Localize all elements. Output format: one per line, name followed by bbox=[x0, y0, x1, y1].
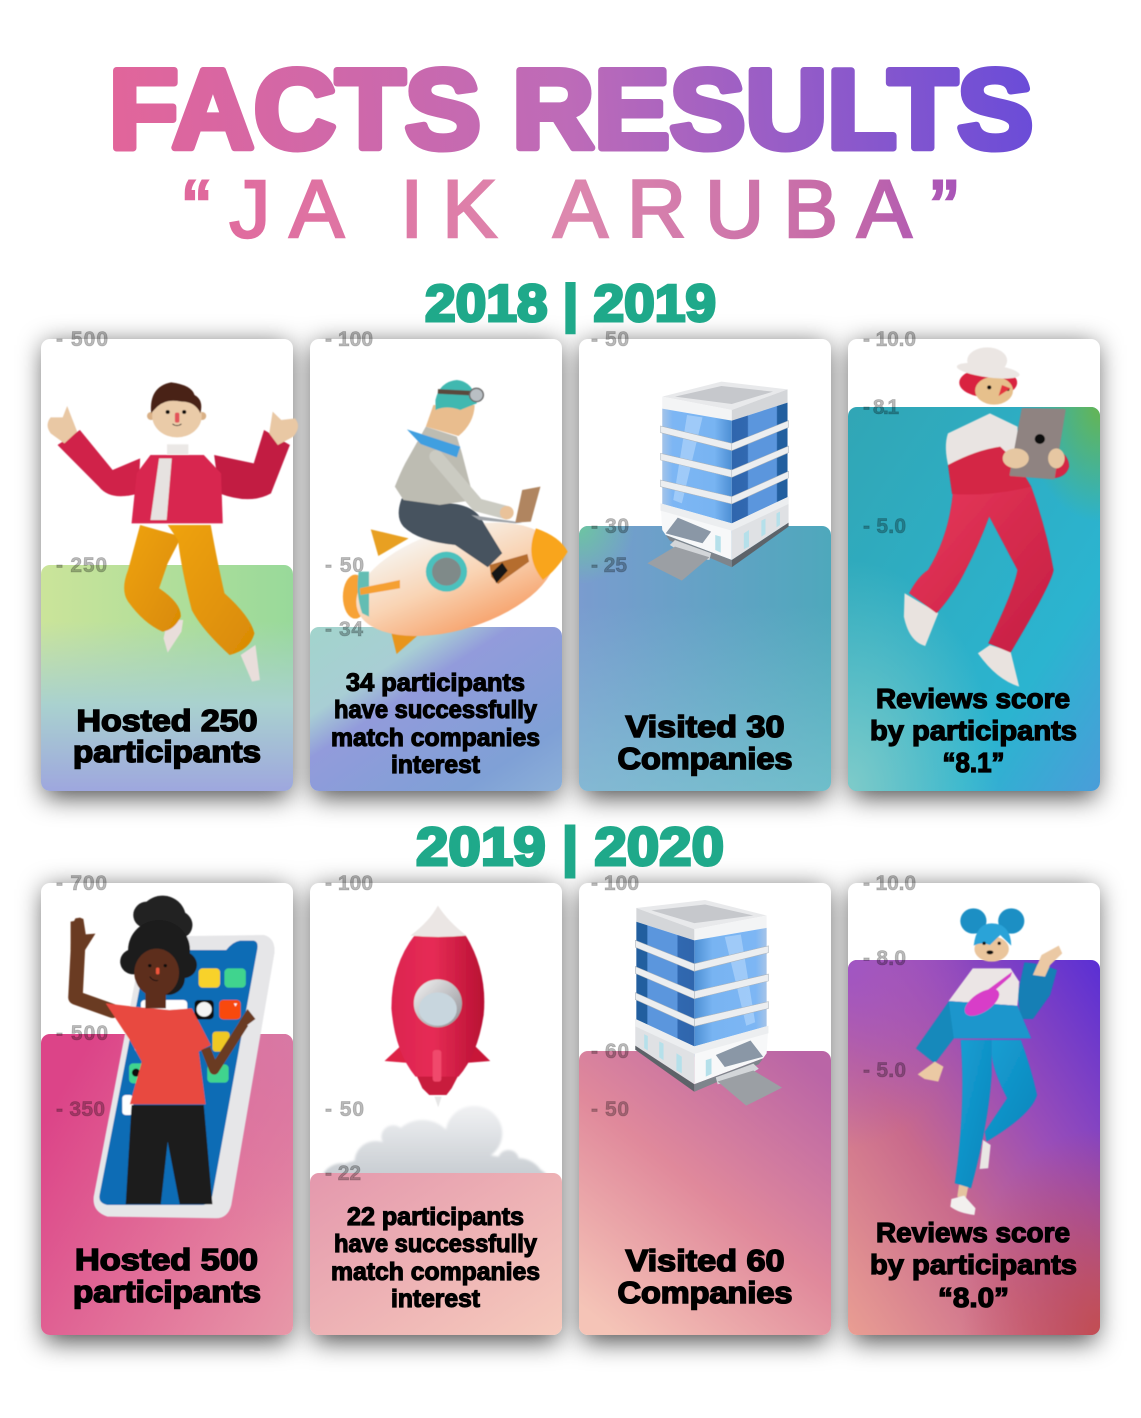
Panel: visited 60 companies bbox=[579, 872, 831, 1335]
Scale ticks: - 30 bbox=[591, 515, 629, 538]
Caption bbox=[73, 703, 261, 769]
Scale ticks bbox=[325, 872, 373, 1185]
Icon: dancing woman in blue bbox=[916, 908, 1062, 1215]
Caption: match companies bbox=[331, 724, 540, 752]
Subtitle: “JA IK ARUBA” bbox=[183, 164, 958, 255]
Caption: participants bbox=[73, 734, 261, 769]
Scale ticks bbox=[591, 872, 639, 1121]
Bar: 8.1 of 10 bbox=[848, 407, 1100, 791]
Caption: interest bbox=[391, 1285, 481, 1313]
Caption: 22 participants bbox=[347, 1203, 524, 1231]
Caption bbox=[618, 1243, 792, 1310]
Caption: “8.1” bbox=[942, 747, 1004, 778]
Scale ticks bbox=[591, 328, 629, 577]
Icon: figure with tablet bbox=[904, 347, 1069, 687]
Scale ticks bbox=[325, 328, 373, 641]
Caption bbox=[618, 709, 792, 776]
Scale ticks: - 100 bbox=[591, 872, 639, 895]
Scale ticks bbox=[56, 872, 108, 1121]
Scale ticks: - 60 bbox=[591, 1040, 629, 1063]
Scale ticks: - 8.0 bbox=[863, 947, 906, 970]
Icon: office building mirrored bbox=[635, 900, 782, 1106]
Caption bbox=[331, 669, 540, 779]
Caption: 34 participants bbox=[346, 669, 525, 697]
Scale ticks: - 50 bbox=[325, 554, 364, 577]
Caption: Hosted 500 bbox=[75, 1242, 258, 1277]
Panel: 22 participants matched bbox=[310, 872, 562, 1335]
Icon: jumping man bbox=[48, 382, 298, 682]
Scale ticks: - 50 bbox=[591, 328, 629, 351]
Panel: review score 8.1 bbox=[848, 328, 1100, 791]
Caption: Companies bbox=[618, 1275, 792, 1310]
Caption: Visited 60 bbox=[626, 1243, 784, 1278]
Caption: Visited 30 bbox=[626, 709, 784, 744]
Caption: Hosted 250 bbox=[76, 703, 258, 738]
Caption bbox=[870, 683, 1077, 778]
Caption bbox=[73, 1242, 261, 1309]
Card shadows bbox=[45, 345, 1096, 1341]
Scale ticks: - 5.0 bbox=[863, 515, 906, 538]
Scale ticks: - 50 bbox=[591, 1098, 629, 1121]
Bar: 500 of 700 bbox=[41, 1034, 293, 1335]
Scale ticks bbox=[56, 328, 108, 577]
Heading: 2019 | 2020: 2019 | 2020 bbox=[416, 817, 724, 878]
Caption: Reviews score bbox=[876, 1217, 1070, 1248]
Caption: Companies bbox=[618, 741, 792, 776]
Bar: 34 of 100 bbox=[310, 627, 562, 791]
Scale ticks: - 8.1 bbox=[863, 396, 899, 419]
Caption: interest bbox=[391, 751, 481, 779]
Scale ticks: - 100 bbox=[325, 872, 373, 895]
Caption bbox=[870, 1217, 1077, 1313]
Scale ticks bbox=[863, 872, 916, 1082]
Heading: 2018 | 2019: 2018 | 2019 bbox=[425, 275, 716, 333]
Scale ticks: - 100 bbox=[325, 328, 373, 351]
Scale ticks: - 250 bbox=[56, 554, 107, 577]
Caption: participants bbox=[73, 1274, 261, 1309]
Icon: cloud of exhaust bbox=[321, 1106, 550, 1212]
Caption bbox=[331, 1203, 540, 1313]
Caption: by participants bbox=[870, 1249, 1077, 1280]
Caption: match companies bbox=[331, 1258, 540, 1286]
Scale ticks: - 700 bbox=[56, 872, 107, 895]
Scale ticks: - 5.0 bbox=[863, 1059, 906, 1082]
Scale ticks: - 10.0 bbox=[863, 872, 916, 895]
Bar: 22 of 100 bbox=[310, 1173, 562, 1335]
Icon: office building bbox=[647, 382, 789, 581]
Scale ticks: - 34 bbox=[325, 618, 363, 641]
Icon: red rocket bbox=[385, 906, 490, 1107]
Bar: 30 of 50 bbox=[579, 526, 831, 791]
Scale ticks: - 50 bbox=[325, 1098, 364, 1121]
Panel: hosted 250 participants bbox=[41, 328, 298, 791]
Scale ticks: - 350 bbox=[56, 1098, 105, 1121]
Title: FACTS RESULTS bbox=[109, 47, 1033, 172]
Scale ticks: - 25 bbox=[591, 554, 627, 577]
Caption: by participants bbox=[870, 715, 1077, 746]
Bar: 250 of 500 bbox=[41, 565, 293, 791]
Caption: Reviews score bbox=[876, 683, 1070, 714]
Bar: 60 of 100 bbox=[579, 1051, 831, 1335]
Panel: review score 8.0 bbox=[848, 872, 1100, 1335]
Panel: hosted 500 participants bbox=[41, 872, 293, 1335]
Panel: visited 30 companies bbox=[579, 328, 831, 791]
Icon: woman and smartphone bbox=[71, 896, 275, 1218]
Caption: “8.0” bbox=[938, 1282, 1009, 1313]
Scale ticks: - 22 bbox=[325, 1162, 361, 1185]
Scale ticks: - 500 bbox=[56, 1022, 108, 1045]
Scale ticks: - 10.0 bbox=[863, 328, 916, 351]
Caption: have successfully bbox=[334, 1230, 537, 1258]
Icon: man riding a rocket bbox=[342, 380, 570, 658]
Bar: 8.0 of 10 bbox=[848, 960, 1100, 1335]
Panel: 34 participants matched bbox=[310, 328, 570, 791]
Caption: have successfully bbox=[334, 696, 537, 724]
Scale ticks: - 500 bbox=[56, 328, 108, 351]
Scale ticks bbox=[863, 328, 916, 538]
